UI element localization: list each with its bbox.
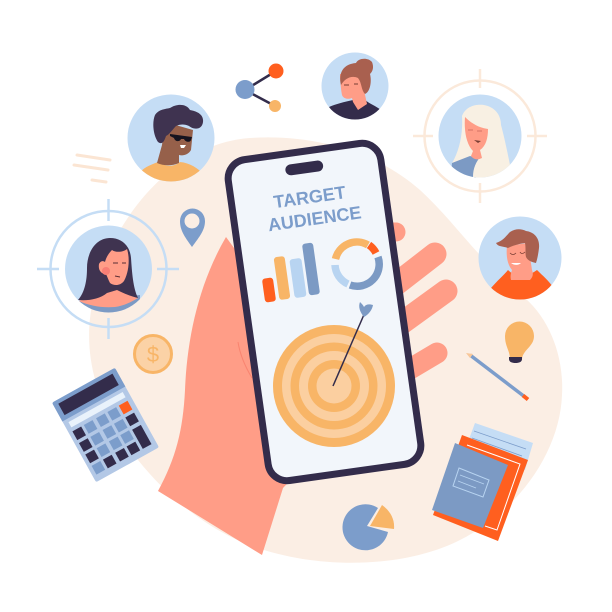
- arrow: [333, 302, 373, 386]
- avatar: woman with bun: [322, 52, 388, 125]
- hand crease: [238, 342, 252, 378]
- phone title: [264, 181, 363, 235]
- share icon: [236, 64, 284, 112]
- bar chart: [262, 242, 320, 303]
- phone title: TARGET: [272, 182, 347, 212]
- phone title: AUDIENCE: [267, 202, 363, 235]
- infographic illustration: [37, 52, 562, 563]
- smartphone: [226, 141, 423, 483]
- phone notch: [285, 160, 324, 176]
- location pin icon: [180, 208, 205, 247]
- orange book: [433, 435, 528, 541]
- phone body: [226, 141, 423, 483]
- target rings: dark hair woman: [37, 199, 179, 339]
- decorative speed lines: [74, 155, 110, 182]
- avatar: dark hair woman: [65, 226, 152, 320]
- pie chart icon: [342, 504, 394, 550]
- hand fingers: [392, 232, 446, 372]
- pencil: [466, 353, 528, 400]
- coin icon: $: [147, 342, 159, 367]
- back paper: [465, 423, 533, 470]
- hand palm: [158, 237, 300, 555]
- avatar: blonde woman: [438, 94, 522, 185]
- background blob: [89, 137, 562, 563]
- coin icon: [134, 336, 172, 372]
- light bulb icon: [505, 322, 534, 363]
- calculator red key: [119, 401, 132, 414]
- donut chart: [335, 242, 379, 286]
- target rings: blonde woman: [413, 69, 547, 203]
- target: [273, 325, 395, 447]
- calculator: [52, 368, 159, 482]
- avatar: man with sunglasses: [128, 94, 214, 190]
- books: [432, 423, 533, 541]
- blue book: [432, 443, 508, 528]
- avatar: man with brown hair: [478, 216, 562, 305]
